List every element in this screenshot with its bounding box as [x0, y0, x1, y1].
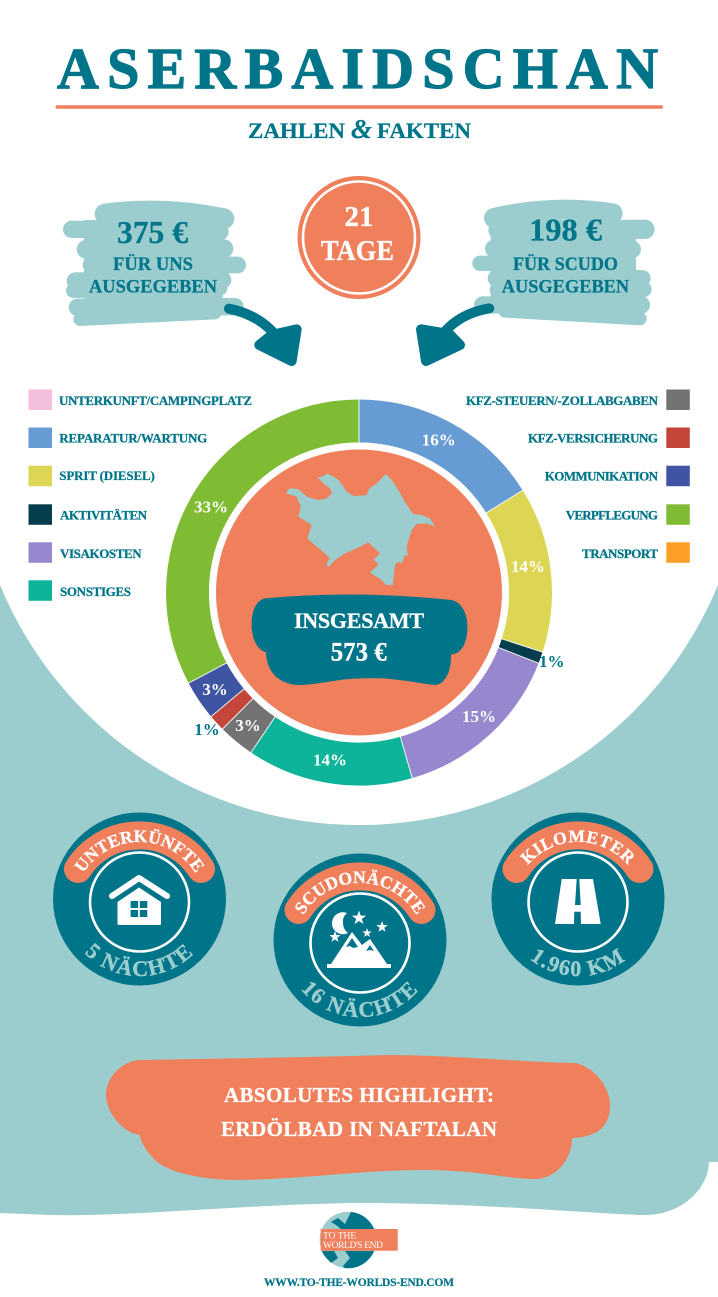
donut chart: 1%: [539, 652, 564, 671]
subtitle: FAKTEN: [377, 118, 471, 143]
arrow: right: [421, 308, 489, 361]
callout: days: 21: [344, 201, 374, 233]
legend: right column: TRANSPORT: [582, 546, 658, 561]
total banner: 573 €: [331, 638, 387, 667]
legend: right column: KFZ-STEUERN/-ZOLLABGABEN: [466, 393, 659, 408]
donut chart: 33%: [194, 498, 228, 516]
callout: days: [298, 176, 420, 299]
callout: spent on Scudo: AUSGEGEBEN: [502, 277, 629, 298]
badge: kilometres: KILOMETER: [520, 830, 634, 866]
teal background panel: [0, 560, 718, 1215]
title: ASERBAIDSCHAN: [57, 36, 658, 101]
badge: Scudo nights: SCUDONÄCHTE: [295, 869, 426, 914]
website url: WWW.TO-THE-WORLDS-END.COM: [264, 1277, 454, 1289]
legend: right column: KOMMUNIKATION: [545, 468, 659, 484]
donut chart: 14%: [511, 557, 545, 576]
donut chart: 3%: [235, 716, 261, 735]
icon: road: [555, 879, 601, 924]
logo: WORLD'S END: [323, 1241, 383, 1251]
badge: kilometres: 1.960 KM: [530, 948, 626, 976]
icon: moon and mountains: [327, 910, 391, 968]
badge: accommodation: UNTERKÜNFTE: [74, 828, 204, 873]
legend: right column: KFZ-VERSICHERUNG: [528, 430, 658, 446]
callout: days: TAGE: [321, 236, 394, 267]
legend: right column: [466, 390, 690, 563]
badge: kilometres: [492, 812, 664, 986]
total banner: [252, 595, 467, 685]
legend: left column: UNTERKUNFT/CAMPINGPLATZ: [59, 393, 252, 408]
subtitle: ZAHLEN: [248, 118, 345, 143]
total banner: INSGESAMT: [294, 608, 424, 633]
legend: left column: SONSTIGES: [60, 584, 131, 599]
donut chart: 16%: [422, 430, 456, 450]
callout: spent on Scudo: [480, 210, 645, 319]
callout: spent on us: FÜR UNS: [113, 254, 193, 275]
map of Azerbaijan: [286, 473, 435, 585]
badge: accommodation: 5 NÄCHTE: [85, 942, 193, 976]
arrow: left: [229, 309, 297, 361]
subtitle: &: [351, 114, 372, 144]
logo: [320, 1212, 398, 1270]
legend: left column: [28, 390, 252, 601]
legend: left column: REPARATUR/WARTUNG: [59, 430, 207, 446]
legend: right column: VERPFLEGUNG: [566, 508, 658, 523]
badge: Scudo nights: [274, 854, 446, 1026]
white circular backdrop: [0, 48, 718, 825]
subtitle: [248, 114, 471, 144]
donut chart: 15%: [462, 707, 496, 726]
highlight banner: ERDÖLBAD IN NAFTALAN: [221, 1117, 497, 1141]
callout: spent on Scudo: FÜR SCUDO: [513, 254, 618, 275]
badge: accommodation: [53, 812, 226, 986]
callout: spent on Scudo: 198 €: [529, 212, 602, 248]
donut chart: 1%: [194, 720, 220, 739]
legend: left column: AKTIVITÄTEN: [60, 508, 148, 523]
callout: spent on us: 375 €: [117, 214, 188, 250]
highlight banner: ABSOLUTES HIGHLIGHT:: [224, 1083, 494, 1107]
callout: spent on us: AUSGEGEBEN: [89, 277, 217, 298]
donut chart: 3%: [202, 680, 228, 699]
logo: TO THE: [323, 1232, 356, 1242]
highlight banner: [106, 1055, 610, 1180]
donut chart: 14%: [313, 750, 347, 770]
icon: house: [112, 878, 167, 925]
badge: Scudo nights: 16 NÄCHTE: [302, 981, 418, 1018]
legend: left column: SPRIT (DIESEL): [59, 468, 155, 483]
legend: left column: VISAKOSTEN: [60, 546, 142, 561]
callout: spent on us: [72, 211, 238, 319]
donut chart: [188, 398, 564, 779]
